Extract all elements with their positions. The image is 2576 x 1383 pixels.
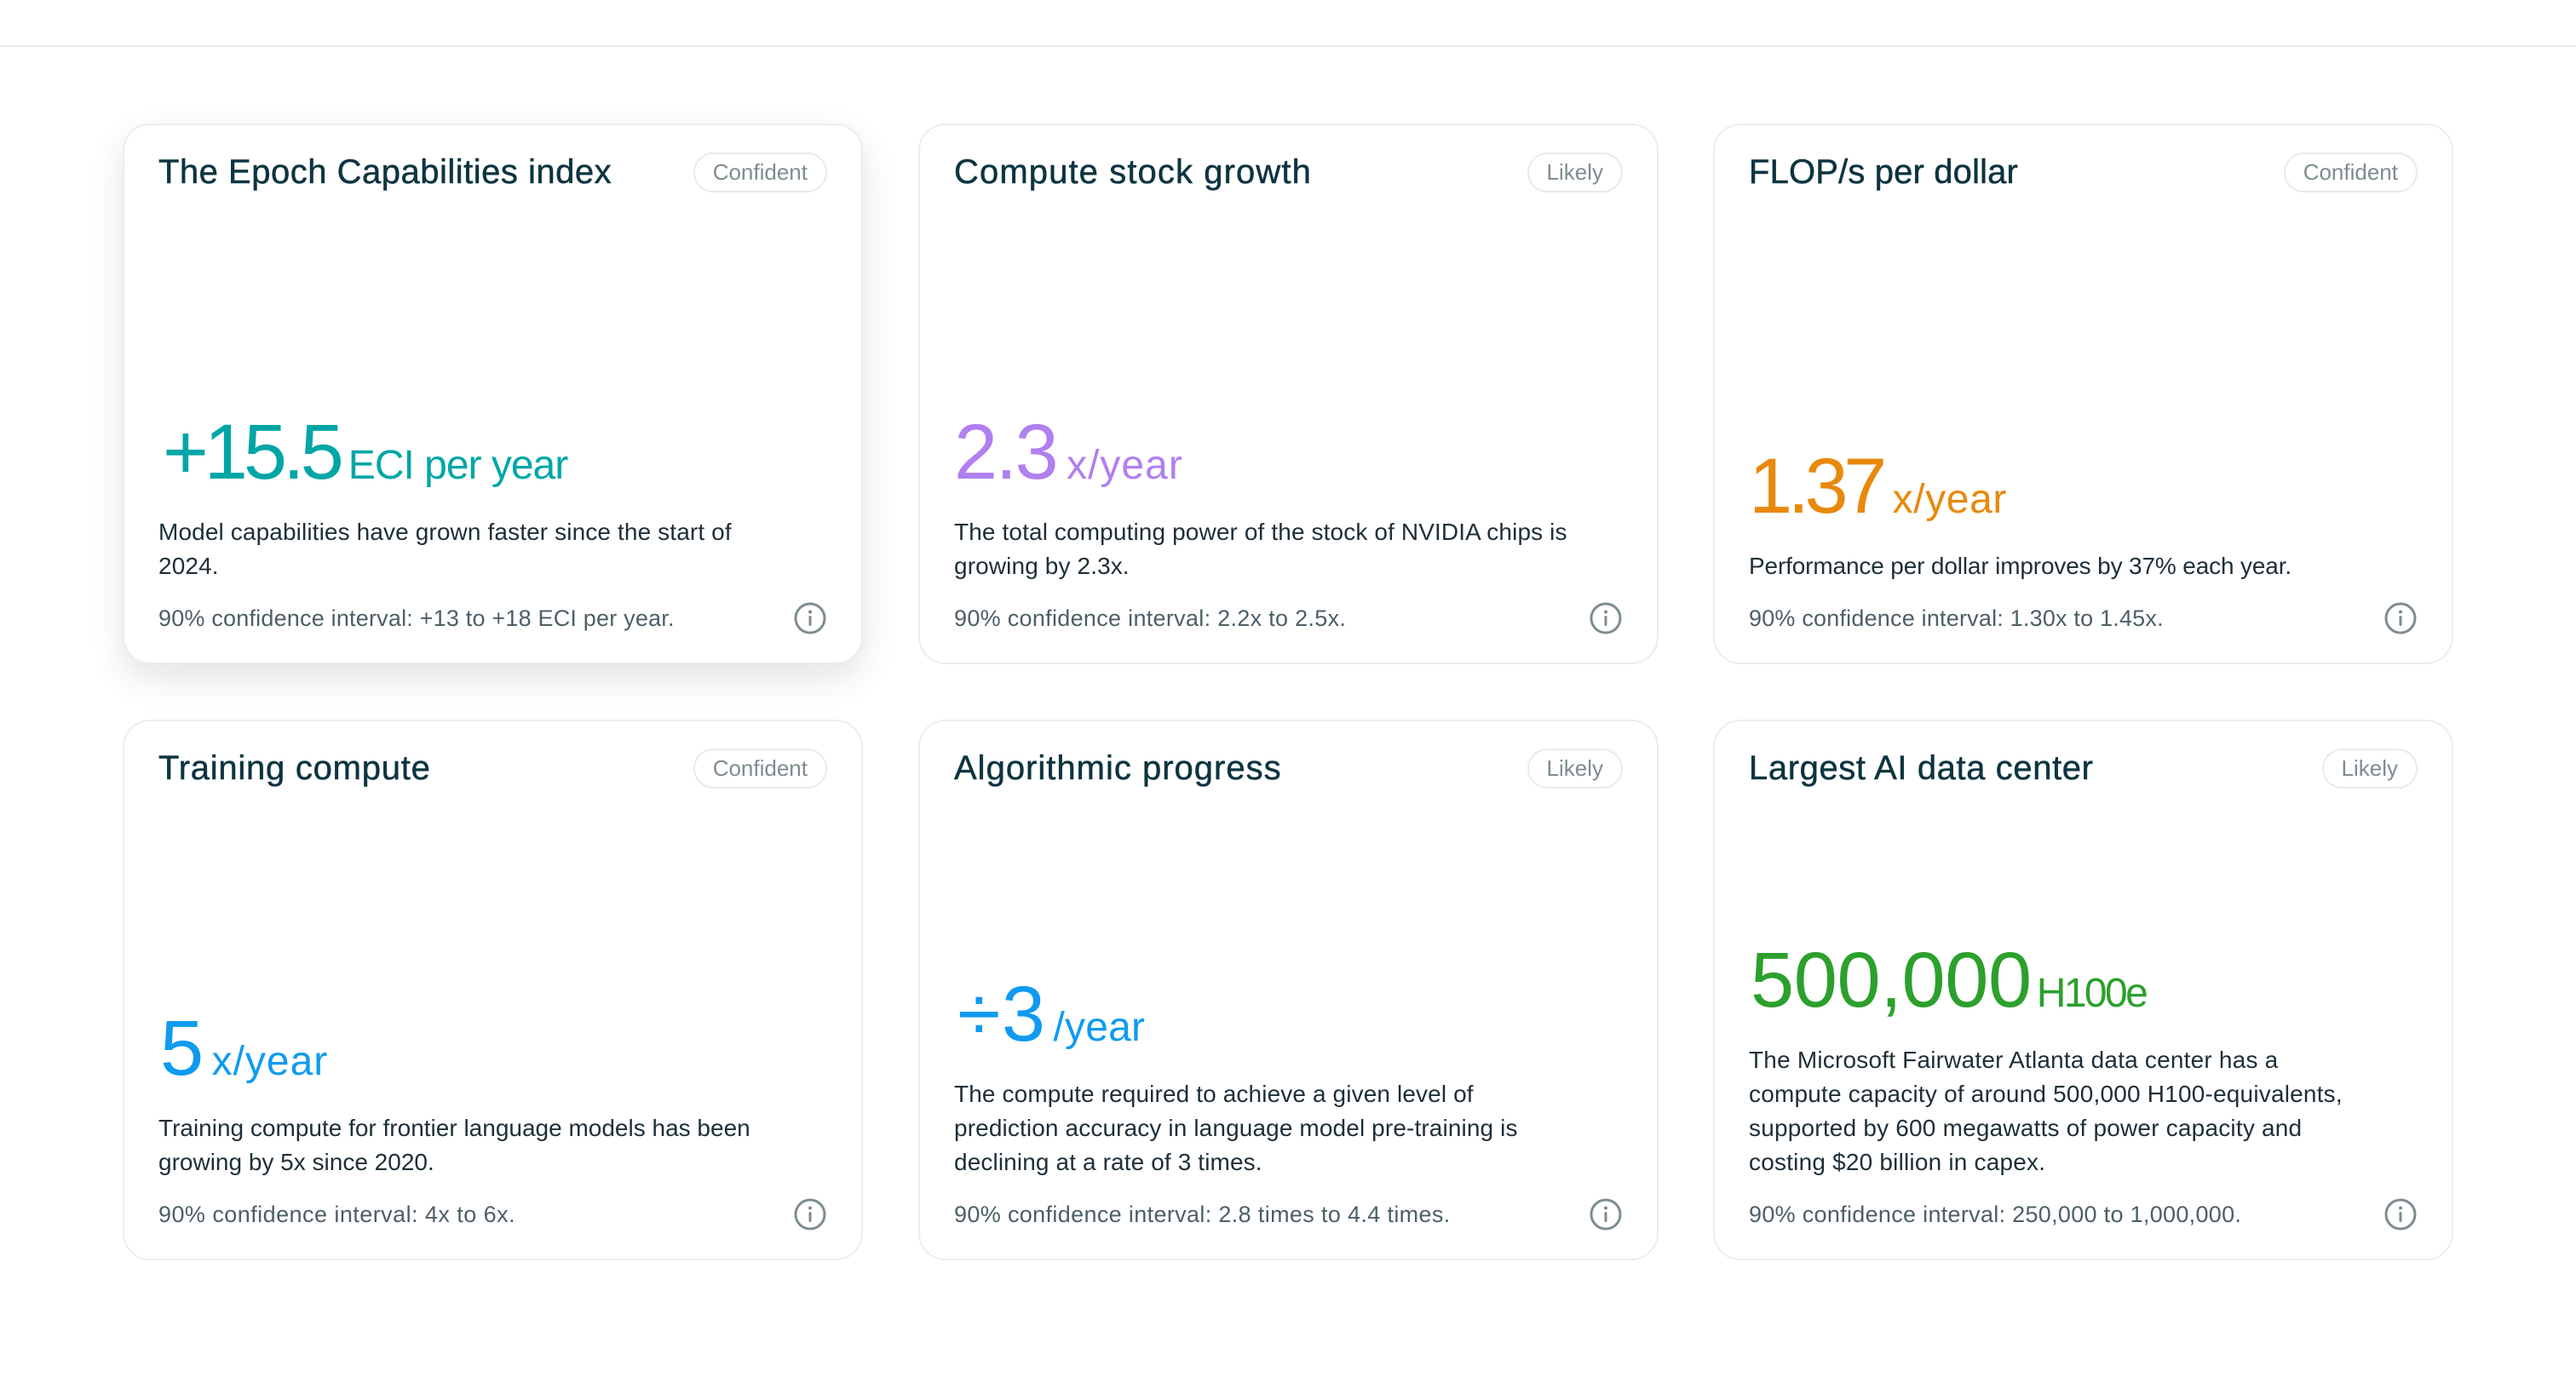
confidence badge [2284, 152, 2418, 192]
metric and description [1749, 938, 2418, 1179]
panel: Compute stock growth [918, 123, 1659, 664]
description: The Microsoft Fairwater Atlanta data center has a [1749, 1047, 2278, 1073]
panel: Training compute [123, 720, 863, 1260]
metric value: 2.3x/year [954, 409, 1183, 496]
confidence badge [1527, 749, 1623, 789]
description: growing by 5x since 2020. [158, 1149, 434, 1175]
description: declining at a rate of 3 times. [954, 1149, 1262, 1175]
description: compute capacity of around 500,000 H100-equivalents, [1749, 1081, 2343, 1107]
description: supported by 600 megawatts of power capacity and [1749, 1115, 2302, 1141]
icon: info [1590, 1198, 1622, 1231]
description: The compute required to achieve a given level of [954, 1081, 1474, 1107]
heading: Compute stock growth [954, 153, 1312, 191]
confidence interval: 90% confidence interval: 1.30x to 1.45x. [1749, 605, 2164, 631]
metric value: 5 x/year [160, 1005, 328, 1092]
description [954, 1077, 1623, 1179]
description: Performance per dollar improves by 37% each year. [1749, 553, 2291, 579]
icon: info [794, 1199, 826, 1230]
confidence interval: 90% confidence interval: 250,000 to 1,000,000. [1749, 1202, 2241, 1227]
icon: info [1590, 603, 1622, 634]
confidence interval: 90% confidence interval: 2.8 times to 4.4 times. [954, 1202, 1451, 1227]
description: The total computing power of the stock of NVIDIA chips is [954, 519, 1567, 545]
confidence badge: Likely [1547, 159, 1603, 185]
confidence badge [1527, 152, 1623, 192]
panel: Algorithmic progress [918, 720, 1659, 1260]
heading: Training compute [158, 749, 431, 787]
metric and description [1749, 443, 2291, 579]
description: 2024. [158, 553, 219, 579]
description: Training compute for frontier language models has been [158, 1115, 750, 1141]
confidence badge: Confident [713, 159, 808, 185]
description: costing $20 billion in capex. [1749, 1149, 2045, 1175]
metric and description [954, 971, 1518, 1175]
metric and description [158, 1005, 750, 1175]
metric value: +15.5ECI per year [163, 409, 567, 496]
confidence interval: 90% confidence interval: +13 to +18 ECI per year. [158, 605, 675, 631]
confidence badge [693, 749, 827, 789]
description: Model capabilities have grown faster since the start of [158, 519, 732, 545]
confidence badge [2322, 749, 2418, 789]
description [954, 519, 1567, 579]
metric value: 1.37x/year [1749, 443, 2007, 530]
panel: Largest AI data center [1713, 720, 2453, 1260]
metric and description [158, 409, 732, 579]
icon: info [2384, 1198, 2417, 1231]
icon: info [794, 603, 826, 634]
metric and description [954, 409, 1567, 579]
panel: The Epoch Capabilities index [123, 123, 863, 664]
description [158, 1115, 750, 1175]
description [158, 519, 732, 579]
heading: FLOP/s per dollar [1749, 153, 2018, 191]
confidence badge: Confident [713, 755, 808, 781]
icon: info [2385, 603, 2416, 634]
heading: Largest AI data center [1749, 749, 2094, 787]
heading: Algorithmic progress [954, 749, 1282, 787]
confidence badge: Confident [2303, 159, 2398, 185]
metric value: ÷3/year [957, 971, 1145, 1058]
confidence badge: Likely [1547, 755, 1603, 781]
heading: The Epoch Capabilities index [158, 153, 612, 191]
description [1749, 1043, 2418, 1179]
panel: FLOP/s per dollar [1713, 123, 2453, 664]
confidence badge [693, 152, 827, 192]
confidence interval: 90% confidence interval: 2.2x to 2.5x. [954, 605, 1346, 631]
description: growing by 2.3x. [954, 553, 1130, 579]
confidence interval: 90% confidence interval: 4x to 6x. [158, 1202, 515, 1227]
description: prediction accuracy in language model pre-training is [954, 1115, 1518, 1141]
metric value: 500,000H100e [1751, 937, 2146, 1024]
top divider [0, 45, 2576, 47]
confidence badge: Likely [2342, 755, 2398, 781]
